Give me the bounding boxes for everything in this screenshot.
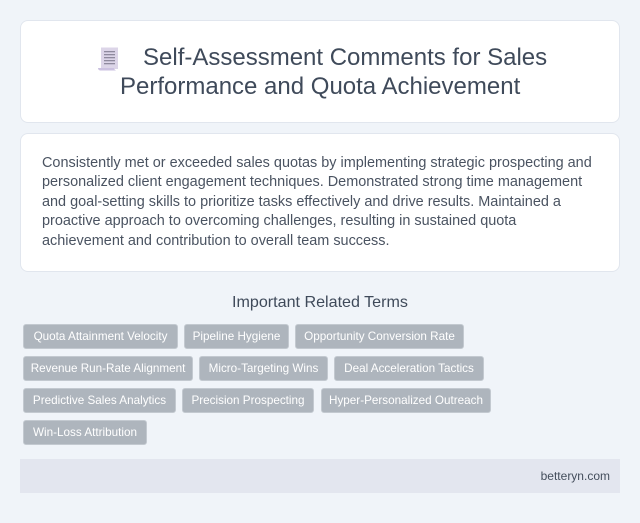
tag xyxy=(23,420,147,445)
tag xyxy=(321,388,491,413)
panel: title xyxy=(20,20,620,123)
tag: Precision Prospecting xyxy=(191,394,305,407)
tag: Quota Attainment Velocity xyxy=(34,330,167,343)
panel: description xyxy=(20,133,620,272)
tag xyxy=(334,356,484,381)
tag: Predictive Sales Analytics xyxy=(33,394,166,407)
icon: document scroll xyxy=(98,48,118,70)
description text: personalized client engagement techniques. Demonstrated strong time management xyxy=(42,174,582,190)
tag xyxy=(23,324,178,349)
tags group xyxy=(23,324,491,445)
tag: Micro-Targeting Wins xyxy=(209,362,318,375)
description text xyxy=(42,155,592,249)
tag: Revenue Run-Rate Alignment xyxy=(31,362,185,375)
title line 1: Self-Assessment Comments for Sales xyxy=(143,44,547,71)
tag xyxy=(23,388,176,413)
title line 2: Performance and Quota Achievement xyxy=(120,73,520,100)
tag: Deal Acceleration Tactics xyxy=(344,362,474,375)
tag: Pipeline Hygiene xyxy=(193,330,280,343)
footer source: betteryn.com xyxy=(541,469,610,483)
description text: proactive approach to overcoming challenges, resulting in sustained quota xyxy=(42,213,516,229)
tag: Hyper-Personalized Outreach xyxy=(329,394,483,407)
tag xyxy=(184,324,289,349)
tag: Opportunity Conversion Rate xyxy=(304,330,455,343)
tag xyxy=(295,324,464,349)
heading: related terms: Important Related Terms xyxy=(232,293,408,311)
footer bar xyxy=(20,459,620,493)
description text: and goal-setting skills to prioritize tasks effectively and drive results. Maintained a xyxy=(42,194,561,210)
description text: Consistently met or exceeded sales quotas by implementing strategic prospecting and xyxy=(42,155,592,171)
tag xyxy=(23,356,193,381)
tag xyxy=(182,388,314,413)
tag: Win-Loss Attribution xyxy=(33,426,137,439)
tag xyxy=(199,356,328,381)
description text: achievement and contribution to overall team success. xyxy=(42,233,390,249)
